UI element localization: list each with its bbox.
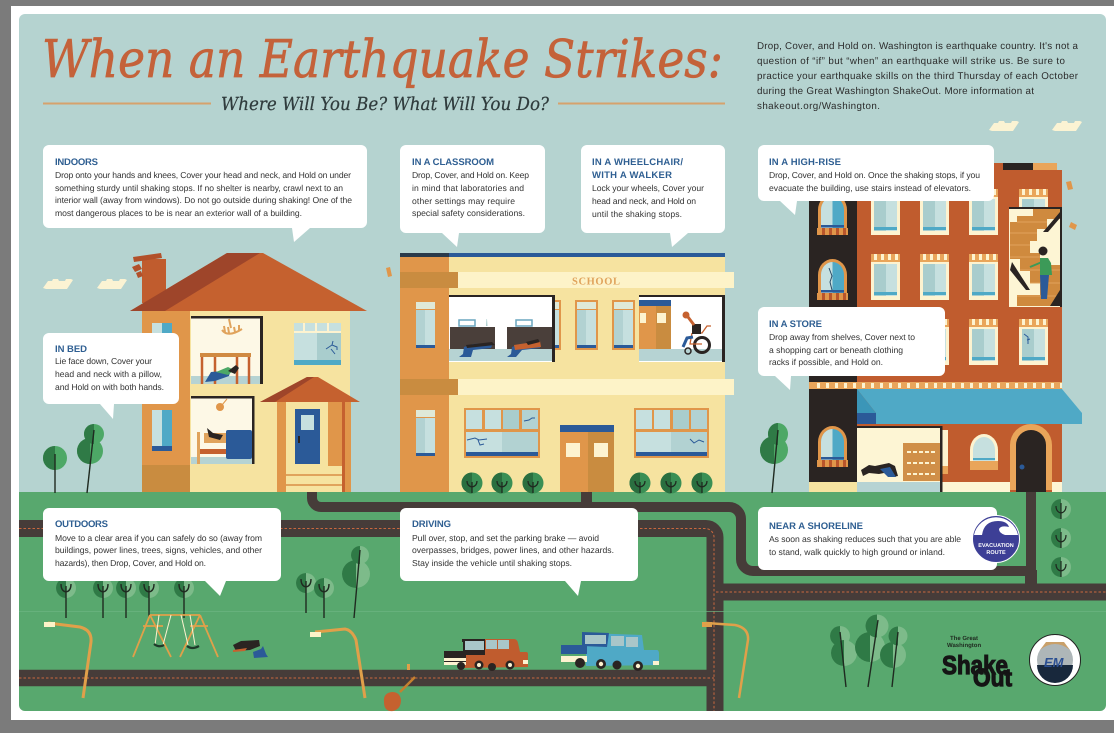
roof [130, 253, 367, 311]
debris [1066, 181, 1077, 230]
callout: near a shoreline [758, 507, 997, 570]
bands and sign: SCHOOL [572, 276, 620, 288]
school [386, 253, 734, 494]
callout: outdoors: Move to a clear area if you can safely do so (away from [55, 533, 262, 543]
callout: in a high-rise: IN A HIGH-RISE [769, 157, 841, 168]
red car [444, 639, 528, 671]
callout: indoors [43, 145, 367, 242]
callout: indoors: something sturdy until shaking stops. If no shelter is nearby, crawl next to an [55, 183, 343, 193]
ShakeOut logo [942, 635, 1013, 692]
callout: driving: Pull over, stop, and set the parking brake — avoid [412, 533, 599, 543]
callout: in a classroom: in mind that laboratories and [412, 183, 524, 193]
high-rise building [809, 163, 1082, 492]
callout: in a store: IN A STORE [769, 319, 822, 330]
house walls [142, 311, 190, 492]
awning [857, 389, 1082, 424]
callout: in a classroom: Drop, Cover, and Hold on. Keep [412, 170, 529, 180]
callout: near a shoreline: to stand, walk quickly to high ground or inland. [769, 547, 945, 557]
intro text block: practice your earthquake skills on the third Thursday of each October [757, 71, 1079, 82]
clouds [43, 121, 1082, 289]
callout: in a classroom: special safety considerations. [412, 208, 525, 218]
icon: tsunami evacuation route badge [972, 516, 1020, 562]
intro text block [757, 41, 1079, 112]
school walls [449, 257, 725, 492]
wheelchair room [639, 295, 725, 362]
porch and door [260, 377, 360, 492]
callout: outdoors [43, 508, 281, 596]
falling debris [386, 267, 392, 277]
Emergency Management seal [1030, 634, 1080, 686]
callout: indoors: INDOORS [55, 157, 98, 168]
ShakeOut logo: Out [973, 664, 1013, 692]
school bushes [462, 472, 712, 494]
icon: tsunami evacuation route badge: EVACUATION [978, 543, 1014, 549]
callout: near a shoreline: As soon as shaking reduces such that you are able [769, 534, 961, 544]
callout: in a classroom: IN A CLASSROOM [412, 157, 494, 168]
street lamps [44, 622, 748, 698]
building windows [817, 189, 1048, 467]
right-hand bushes [1051, 499, 1071, 577]
callout: indoors: Drop onto your hands and knees, Cover your head and neck, and Hold on under [55, 170, 351, 180]
callout: in a store: Drop away from shelves, Cover next to [769, 332, 915, 342]
large lower windows [464, 408, 709, 458]
trees beside buildings [43, 423, 788, 493]
intro text block: shakeout.org/Washington. [757, 101, 880, 112]
callout: in a high-rise: evacuate the building, use stairs instead of elevators. [769, 183, 971, 193]
person outdoors [233, 640, 268, 658]
park trees [56, 546, 370, 618]
callout: driving: overpasses, bridges, power lines, and other hazards. [412, 545, 614, 555]
sky panel [19, 14, 1106, 504]
callout: driving [400, 508, 638, 596]
callout: indoors: most dangerous places to be is near an exterior wall of a building. [55, 208, 302, 218]
ShakeOut logo: The Great [950, 635, 978, 642]
callout: in a wheelchair: WITH A WALKER [592, 170, 672, 181]
road network [19, 490, 1106, 711]
callout: in a wheelchair: until the shaking stops. [592, 209, 682, 219]
upper room: table [191, 316, 263, 384]
title: When an Earthquake Strikes: [42, 30, 723, 90]
callout: in a store [758, 307, 945, 390]
callout: in a wheelchair: head and neck, and Hold on [592, 196, 696, 206]
school windows [414, 300, 635, 458]
ShakeOut logo: Washington [947, 642, 981, 649]
subtitle with rules: Where Will You Be? What Will You Do? [221, 94, 549, 115]
callout: in a wheelchair: IN A WHEELCHAIR/ [592, 157, 683, 168]
lower windows [942, 430, 998, 474]
ShakeOut logo: Shake [942, 650, 1008, 680]
intro text block: Drop, Cover, and Hold on. Washington is earthquake country. It's not a [757, 41, 1079, 52]
callout: driving: DRIVING [412, 519, 451, 530]
house [130, 253, 367, 492]
callout: in a classroom: other settings may require [412, 196, 515, 206]
callout: in a high-rise: Drop, Cover, and Hold on. Once the shaking stops, if you [769, 170, 980, 180]
ground panel [19, 492, 1106, 711]
right cracked window [294, 323, 341, 365]
frieze [809, 382, 1062, 389]
callout: in bed: and Hold on with both hands. [55, 382, 164, 392]
blue car [561, 632, 659, 671]
Emergency Management seal: EM [1044, 655, 1065, 670]
arched door [1010, 424, 1052, 492]
stairwell [1009, 207, 1062, 307]
callout: outdoors: OUTDOORS [55, 519, 108, 530]
callout: in bed: Lie face down, Cover your [55, 356, 152, 366]
callout: in a high-rise [758, 145, 994, 215]
store interior [857, 426, 942, 492]
callout: outdoors: buildings, power lines, trees, signs, vehicles, and other [55, 545, 262, 555]
brick walls [857, 163, 1062, 492]
callout: outdoors: hazards), then Drop, Cover, and Hold on. [55, 558, 206, 568]
callout: indoors: interior wall (away from windows). Do not go outside during shaking! One of the [55, 195, 352, 205]
callout: driving: Stay inside the vehicle until shaking stops. [412, 558, 572, 568]
callout: in a store: racks if possible, and Hold on. [769, 357, 883, 367]
callout: in bed: head and neck with a pillow, [55, 369, 162, 379]
icon: tsunami evacuation route badge: ROUTE [986, 550, 1006, 556]
intro text block: question of “if” but “when” an earthquake will strike us. Be sure to [757, 56, 1066, 67]
lower right trees [830, 614, 908, 687]
intro text block: during the Great Washington ShakeOut. More information at [757, 86, 1034, 97]
lower room: bed [191, 396, 254, 464]
bands and sign [400, 272, 734, 395]
building base [809, 482, 1062, 492]
callout: in a classroom [400, 145, 545, 247]
callout: near a shoreline: NEAR A SHORELINE [769, 521, 863, 532]
left windows [152, 323, 172, 451]
callout: in a wheelchair: Lock your wheels, Cover your [592, 183, 704, 193]
callout: in bed: IN BED [55, 344, 87, 355]
callout: in bed [43, 333, 179, 419]
fallen sign [384, 664, 415, 711]
chimney [132, 253, 166, 303]
school doors [560, 425, 614, 492]
callout: in a store: a shopping cart or beneath clothing [769, 345, 903, 355]
classroom [449, 295, 555, 362]
callout: in a wheelchair [581, 145, 725, 247]
swing set [133, 615, 218, 657]
